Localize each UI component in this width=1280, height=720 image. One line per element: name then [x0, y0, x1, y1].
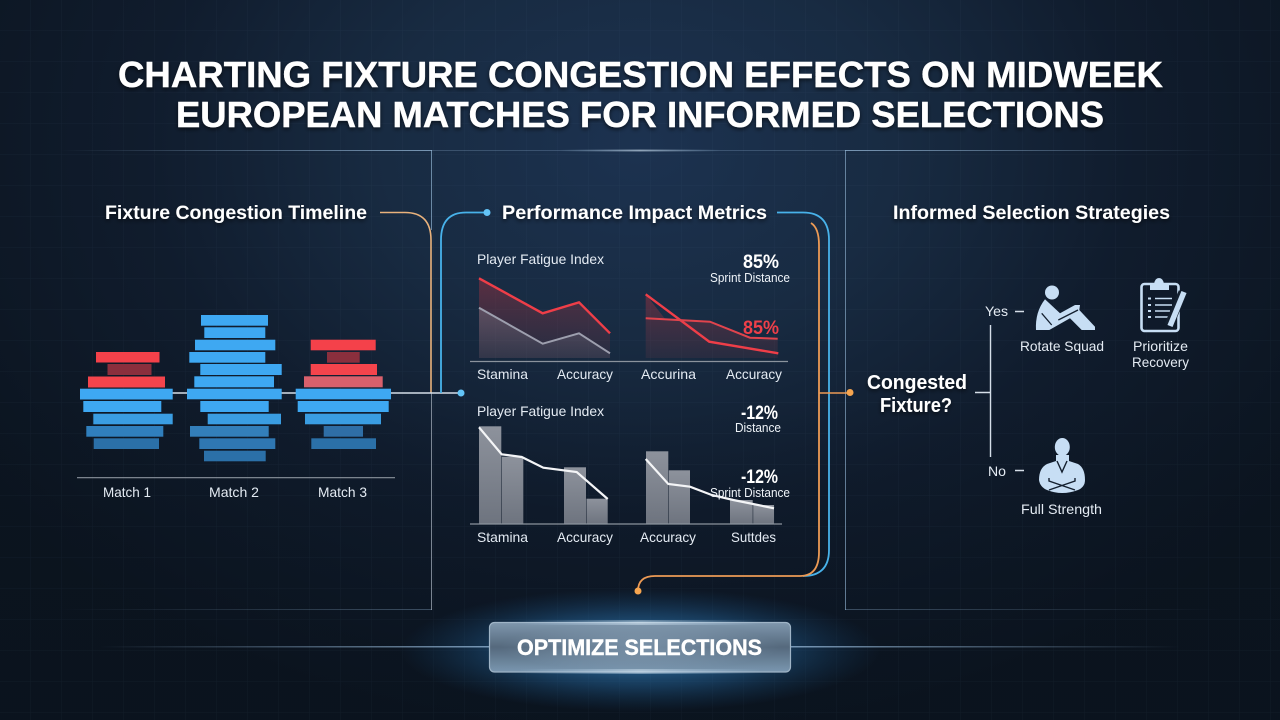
label: prioritize recovery: Recovery	[1132, 354, 1189, 370]
stat: -12% distance	[735, 403, 781, 435]
decision tree	[975, 303, 1024, 479]
bar and line chart: player fatigue index left: Player Fatigue Index	[477, 403, 604, 419]
button: optimize selections: OPTIMIZE SELECTIONS	[517, 635, 762, 660]
heading: strategies: Informed Selection Strategies	[893, 203, 1170, 224]
axis and labels: upper charts: Accurina	[641, 366, 696, 382]
question: congested fixture: Fixture?	[880, 395, 952, 417]
connector line between matches	[172, 392, 296, 394]
panel: fixture congestion timeline	[77, 203, 395, 500]
side lines to button	[100, 646, 1180, 648]
question: congested fixture	[867, 372, 967, 417]
stacked bars: match 1	[80, 352, 173, 449]
stat: -12% sprint distance	[710, 467, 790, 500]
connector: blue metrics input	[391, 209, 490, 396]
panel frames	[60, 150, 1220, 610]
axis and labels: lower charts: Suttdes	[731, 529, 776, 545]
label: rotate squad: Rotate Squad	[1020, 338, 1104, 354]
axis and labels: upper charts: Stamina	[477, 366, 528, 382]
connector: blue metrics output	[777, 212, 829, 576]
axis and labels: upper charts	[470, 362, 788, 382]
axis and labels: lower charts: Accuracy	[640, 529, 696, 545]
icon: standing player arms crossed	[1039, 438, 1085, 493]
axis and labels: lower charts	[470, 524, 782, 545]
button: optimize selections	[490, 620, 790, 674]
line chart: player fatigue index left: Player Fatigue Index	[477, 251, 604, 267]
axis and labels: upper charts: Accuracy	[557, 366, 613, 382]
axis	[77, 477, 395, 479]
match labels	[103, 484, 367, 500]
bar and line chart: right	[646, 451, 774, 524]
stacked bars: match 3	[296, 340, 391, 449]
stat: -12% sprint distance: Sprint Distance	[710, 486, 790, 500]
label: prioritize recovery	[1132, 338, 1189, 370]
label: full strength: Full Strength	[1021, 501, 1102, 517]
heading: timeline: Fixture Congestion Timeline	[105, 203, 367, 224]
panel: informed selection strategies	[867, 203, 1189, 517]
stat: 85% sprint distance: Sprint Distance	[710, 271, 790, 285]
icon: clipboard	[1142, 278, 1184, 331]
match labels: Match 3	[318, 484, 367, 500]
axis and labels: lower charts: Stamina	[477, 529, 528, 545]
stat: -12% sprint distance: -12%	[741, 467, 778, 488]
decision tree: No	[988, 463, 1006, 479]
question: congested fixture: Congested	[867, 372, 967, 394]
stat: -12% distance: Distance	[735, 421, 781, 435]
decision tree: Yes	[985, 303, 1008, 319]
title: EUROPEAN MATCHES FOR INFORMED SELECTIONS	[176, 94, 1104, 135]
axis and labels: upper charts: Accuracy	[726, 366, 782, 382]
panel: performance impact metrics	[470, 203, 790, 545]
line chart: sprint distance right	[646, 294, 778, 358]
stacked bars: match 2	[187, 315, 282, 461]
stat: 85% sprint distance: 85%	[743, 252, 779, 273]
icon: seated player	[1036, 286, 1095, 330]
title: CHARTING FIXTURE CONGESTION EFFECTS ON MIDWEEK	[118, 54, 1163, 95]
label: prioritize recovery: Prioritize	[1133, 338, 1188, 354]
bar and line chart: player fatigue index left	[477, 403, 608, 524]
axis and labels: lower charts: Accuracy	[557, 529, 613, 545]
stat: 85% red: 85%	[743, 318, 779, 339]
line chart: player fatigue index left	[477, 251, 610, 358]
connector: orange metrics output	[634, 223, 854, 594]
connector: orange timeline to centre	[380, 212, 431, 393]
stat: -12% distance: -12%	[741, 403, 778, 424]
title	[118, 54, 1163, 135]
heading: metrics: Performance Impact Metrics	[502, 203, 767, 224]
stat: 85% sprint distance	[710, 252, 790, 285]
match labels: Match 1	[103, 484, 151, 500]
match labels: Match 2	[209, 484, 259, 500]
